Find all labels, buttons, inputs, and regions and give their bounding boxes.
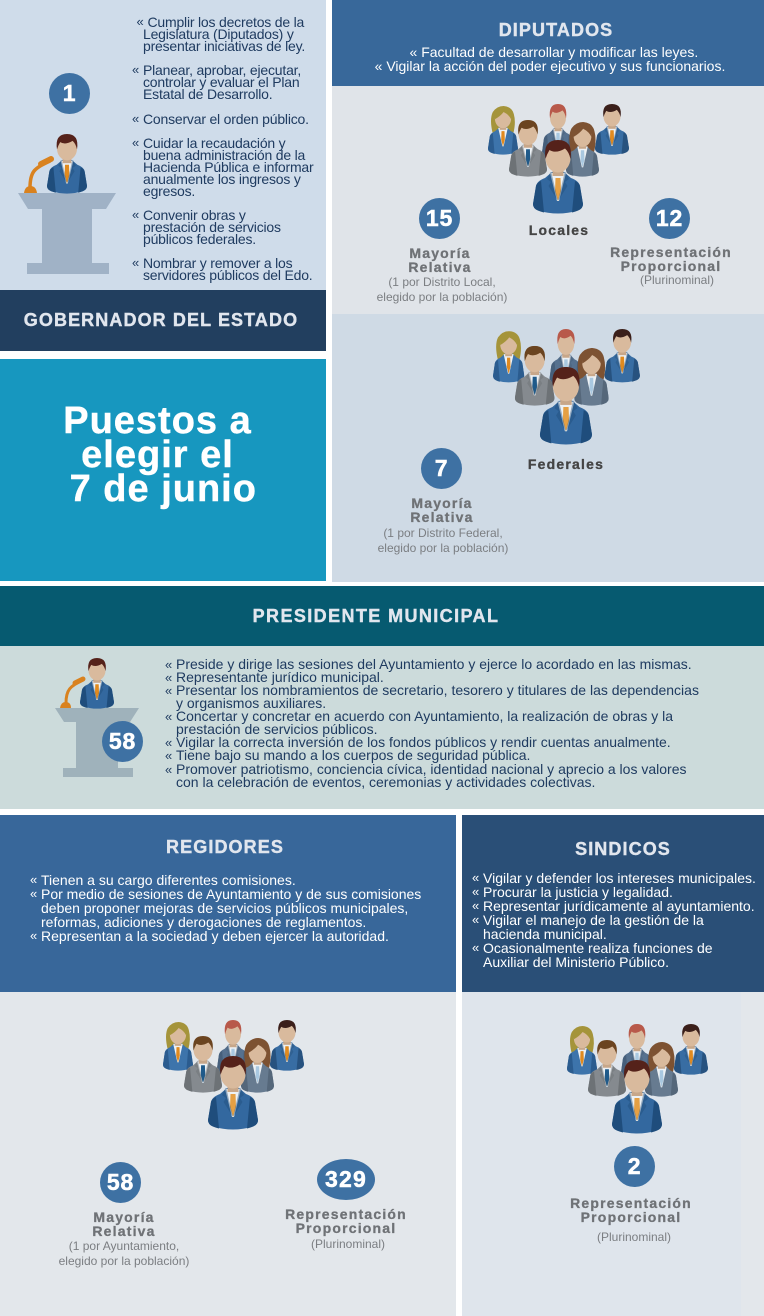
header: regidores (0, 815, 456, 992)
panel: presidente municipal: « (165, 683, 172, 698)
heading: diputados: DIPUTADOS (499, 20, 613, 40)
badge: 329 (317, 1159, 375, 1200)
badge: 58 presidentes (102, 721, 143, 762)
label: federales: Federales (528, 456, 604, 472)
header: sindicos: « (472, 884, 479, 899)
badge: 58 presidentes: 58 (109, 728, 136, 754)
label: mayoria relativa regidores: (1 por Ayuntamiento, elegido por la población) (59, 1239, 189, 1268)
list: facultades gobernador: Conservar el orden público. (143, 111, 309, 127)
badge: 58 regidores: 58 (107, 1169, 134, 1195)
panel: presidente municipal: « (165, 762, 172, 777)
badge: 15: 15 (426, 205, 453, 231)
icon: gobernador at podium (18, 134, 116, 274)
panel: presidente municipal: « (165, 735, 172, 750)
list: facultades gobernador: Planear, aprobar, ejecutar, controlar y evaluar el Plan Estatal de Desarrollo. (143, 62, 301, 102)
badge: 7: 7 (435, 455, 448, 481)
header: regidores: « (30, 872, 37, 887)
label: representacion proporcional: Representación Proporcional (610, 244, 732, 274)
panel: sindicos (462, 815, 764, 1316)
list: facultades gobernador: « (132, 255, 139, 270)
panel: diputados encabezado (332, 0, 764, 86)
badge: 1 gobernador: 1 (63, 80, 76, 106)
list: facultades gobernador: « (132, 207, 139, 222)
icon: grupo regidores (163, 1020, 304, 1130)
panel: diputados federales (332, 314, 764, 582)
label: representacion sindicos (570, 1195, 692, 1244)
panel: diputados locales (332, 86, 764, 314)
list: facultades gobernador: « (132, 135, 139, 150)
icon: grupo locales (488, 104, 629, 214)
label: mayoria relativa (377, 245, 507, 304)
heading: regidores: REGIDORES (166, 837, 284, 857)
header: sindicos: « (472, 912, 479, 927)
heading: gobernador del estado: GOBERNADOR DEL ESTADO (24, 310, 298, 330)
badge: 15 (419, 198, 460, 239)
list: funciones sindicos: Vigilar y defender los intereses municipales. Procurar la justicia y legalidad. Representar jurídicamente al ayuntamiento. Vigilar el manejo de la gestión de la hacienda municipal. Ocasionalmente realiza funciones de Auxiliar del Ministerio Público. (483, 870, 756, 970)
panel: puestos a elegir (0, 359, 326, 581)
label: mayoria relativa federal: (1 por Distrito Federal, elegido por la población) (378, 526, 508, 555)
badge: 58 regidores (100, 1162, 141, 1203)
label: mayoria relativa: Mayoría Relativa (408, 245, 472, 275)
list: facultades gobernador: Nombrar y remover a los servidores públicos del Edo. (143, 255, 312, 283)
header: sindicos: « (472, 940, 479, 955)
label: mayoria relativa federal: Mayoría Relativa (410, 495, 474, 525)
label: representacion sindicos: (Plurinominal) (597, 1230, 671, 1244)
badge: 2 (614, 1146, 655, 1187)
header: sindicos (462, 815, 764, 992)
list: facultades gobernador: « (132, 62, 139, 77)
panel: regidores (0, 815, 456, 1316)
list: facultades gobernador (132, 14, 314, 283)
label: locales: Locales (529, 222, 589, 238)
label: representacion proporcional: (Plurinominal) (640, 273, 714, 287)
label: representacion proporcional (610, 244, 732, 287)
badge: 7 (421, 448, 462, 489)
panel: gobernador (0, 0, 326, 351)
list: facultades gobernador: Convenir obras y prestación de servicios públicos federales. (143, 207, 281, 247)
label: mayoria relativa regidores: Mayoría Relativa (92, 1209, 156, 1239)
icon: grupo sindicos (567, 1024, 708, 1134)
heading: presidente municipal: PRESIDENTE MUNICIPAL (253, 606, 499, 626)
badge: 2: 2 (628, 1153, 641, 1179)
header: regidores: « (30, 928, 37, 943)
header: regidores: « (30, 886, 37, 901)
label: representacion regidores (285, 1206, 407, 1251)
icon: grupo federales (493, 329, 640, 444)
list: facultades gobernador: « (136, 14, 144, 29)
list: facultades presidente: Promover patriotismo, conciencia cívica, identidad nacional y aprecio a los valores con la celebración de eventos, ceremonias y actividades colectivas. (176, 761, 686, 790)
label: mayoria relativa: (1 por Distrito Local, elegido por la población) (377, 275, 507, 304)
heading: sindicos: SINDICOS (575, 839, 671, 859)
panel: presidente municipal: « (165, 748, 172, 763)
heading: gobernador del estado (0, 290, 326, 351)
label: mayoria relativa regidores (59, 1209, 189, 1268)
list: facultades gobernador: Legislatura (Diputados) y presentar iniciativas de ley. (143, 26, 305, 54)
badge: 12: 12 (656, 205, 683, 231)
icon: presidente at podium (55, 658, 139, 777)
panel: presidente municipal: « (165, 670, 172, 685)
list: facultades gobernador: « (132, 111, 139, 126)
badge: 1 gobernador (49, 73, 90, 114)
header: sindicos: « (472, 898, 479, 913)
heading: presidente municipal (0, 586, 764, 646)
panel: presidente municipal (0, 586, 764, 809)
badge: 329: 329 (325, 1166, 367, 1192)
text: funciones diputados: « Facultad de desarrollar y modificar las leyes. « Vigilar la acción del poder ejecutivo y sus funcionarios. (375, 44, 725, 74)
label: mayoria relativa federal (378, 495, 508, 555)
header: sindicos: « (472, 870, 479, 885)
panel: presidente municipal: « (165, 709, 172, 724)
label: representacion regidores: Representación Proporcional (285, 1206, 407, 1236)
list: facultades presidente: Preside y dirige las sesiones del Ayuntamiento y ejerce lo acordado en las mismas. Representante jurídico municipal. Presentar los nombramientos de secretario, tesorero y titulares de las dependencias y organismos auxiliares. Concertar y concretar en acuerdo con Ayuntamiento, la realización de obras y la prestación de servicios públicos. Vigilar la correcta inversión de los fondos públicos y rendir cuentas anualmente. Tiene bajo su mando a los cuerpos de seguridad pública. (176, 656, 699, 763)
panel: presidente municipal: « (165, 657, 172, 672)
label: representacion sindicos: Representación Proporcional (570, 1195, 692, 1225)
list: facultades gobernador: Cumplir los decretos de la (148, 14, 304, 30)
label: representacion regidores: (Plurinominal) (311, 1237, 385, 1251)
list: facultades gobernador: Cuidar la recaudación y buena administración de la Hacienda Pública e informar anualmente los ingresos y egresos. (143, 135, 313, 199)
badge: 12 (649, 198, 690, 239)
list: funciones regidores: Tienen a su cargo diferentes comisiones. Por medio de sesiones de Ayuntamiento y de sus comisiones deben proponer mejoras de servicios públicos municipales, reformas, adiciones y derogaciones de reglamentos. Representan a la sociedad y deben ejercer la autoridad. (41, 872, 421, 944)
title: Puestos a elegir el 7 de junio (58, 400, 257, 510)
